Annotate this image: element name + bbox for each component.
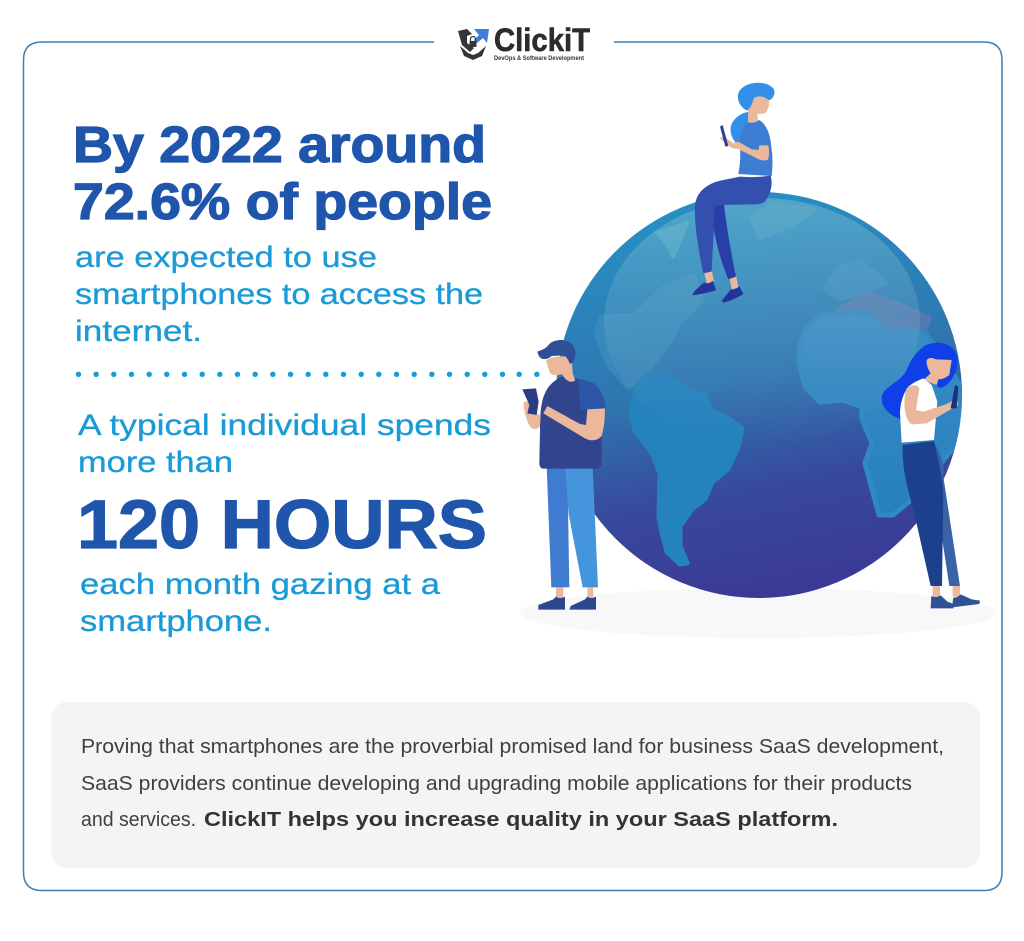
top xyxy=(900,378,937,443)
heading: By 2022 around 72.6% of people xyxy=(73,116,492,230)
neck and face xyxy=(923,358,952,385)
globe illustration xyxy=(556,192,970,598)
ponytail xyxy=(731,112,750,146)
continent: Africa xyxy=(799,312,970,515)
shoes xyxy=(931,595,953,608)
left leg xyxy=(547,467,569,587)
summary text: Proving that smartphones are the proverbial promised land for business SaaS development, xyxy=(81,735,944,758)
hair xyxy=(882,343,957,421)
dotted divider xyxy=(76,372,540,377)
heading: By 2022 around 72.6% of people: By 2022 around xyxy=(73,116,486,173)
ground shadow xyxy=(520,588,996,638)
near leg xyxy=(903,441,943,586)
text block: expected smartphone use: are expected to use xyxy=(75,241,377,274)
continent: Canada island xyxy=(657,223,687,257)
right leg xyxy=(565,467,598,587)
icon: shield with lock xyxy=(458,29,489,60)
arm xyxy=(543,406,605,440)
far leg xyxy=(935,443,960,586)
shoes xyxy=(693,281,716,295)
continent: Scandinavia xyxy=(825,262,885,298)
summary text xyxy=(81,735,944,831)
globe highlight xyxy=(604,198,920,392)
ankles xyxy=(556,587,593,598)
figure: woman with phone xyxy=(882,343,980,608)
summary text: ClickIT helps you increase quality in your SaaS platform. xyxy=(204,808,838,831)
shirt xyxy=(539,377,606,469)
text block: gazing at a smartphone: smartphone. xyxy=(80,605,272,638)
phone xyxy=(951,385,958,408)
phone xyxy=(522,388,539,415)
text block: gazing at a smartphone xyxy=(80,568,440,638)
continent: Greenland xyxy=(752,205,813,237)
arm xyxy=(733,142,769,160)
shoes xyxy=(538,597,565,610)
hair xyxy=(738,83,775,111)
text block: expected smartphone use xyxy=(75,241,483,348)
phone xyxy=(720,125,728,147)
hair xyxy=(537,340,575,364)
continent: Europe xyxy=(837,292,930,328)
summary text: SaaS providers continue developing and upgrading mobile applications for their products xyxy=(81,772,912,795)
text block: typical individual xyxy=(78,409,491,479)
neck and face xyxy=(546,356,575,382)
arm xyxy=(904,385,958,424)
panel: summary xyxy=(51,702,980,868)
text block: typical individual: more than xyxy=(78,446,233,479)
figure: seated woman xyxy=(693,83,775,303)
continent: South America xyxy=(631,375,742,564)
summary text: and services. xyxy=(81,808,196,831)
shirt sleeve xyxy=(578,380,606,410)
heading: By 2022 around 72.6% of people: 72.6% of people xyxy=(73,173,492,230)
figure: man with phone xyxy=(522,340,606,610)
continent: North America xyxy=(597,278,700,385)
text block: typical individual: A typical individual spends xyxy=(78,409,491,442)
text block: expected smartphone use: internet. xyxy=(75,315,202,348)
shirt xyxy=(738,120,772,176)
far leg xyxy=(713,205,736,279)
ankles xyxy=(933,586,960,597)
logo: ClickiT xyxy=(458,22,590,62)
text block: gazing at a smartphone: each month gazing at a xyxy=(80,568,440,601)
logo tagline: DevOps & Software Development xyxy=(494,55,585,62)
big stat: 120 HOURS: 120 HOURS xyxy=(77,486,487,563)
ankles xyxy=(704,270,738,289)
neck and face xyxy=(748,95,769,123)
logo wordmark: ClickiT xyxy=(494,22,590,58)
text block: expected smartphone use: smartphones to access the xyxy=(75,278,483,311)
pants and near leg xyxy=(695,175,772,273)
